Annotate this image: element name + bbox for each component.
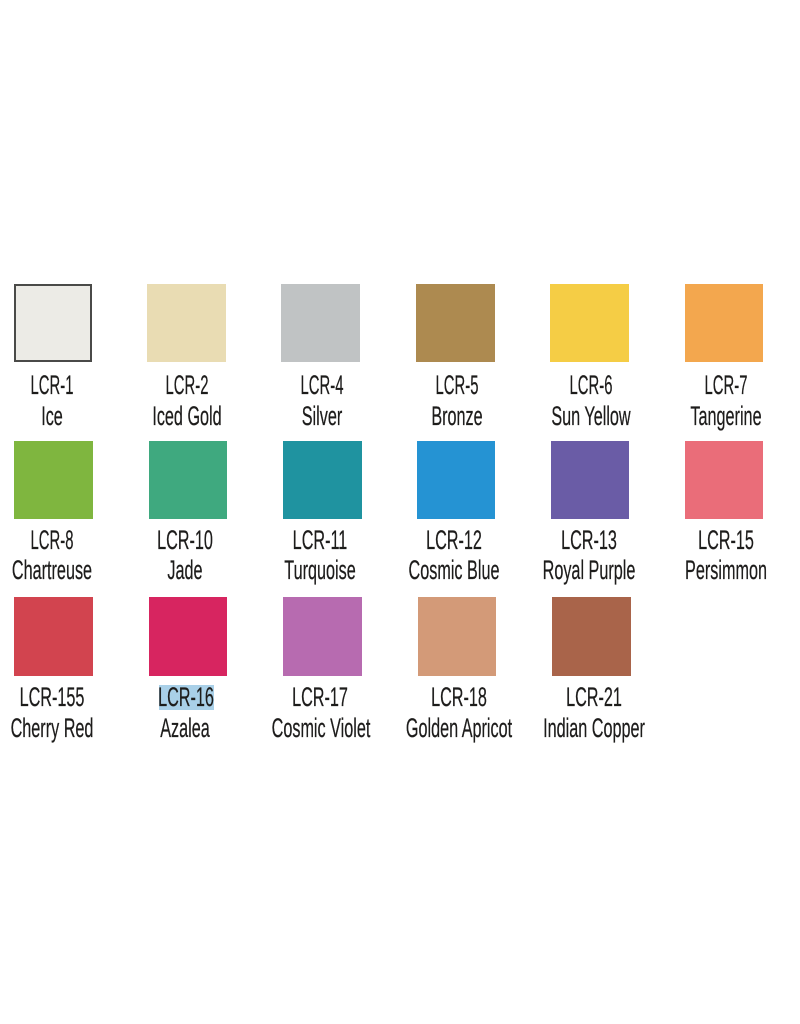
code label: LCR-6 <box>570 370 612 400</box>
name label: Silver <box>302 401 342 431</box>
swatch: LCR-5 Bronze <box>416 284 495 431</box>
name label: Ice <box>41 401 63 431</box>
code label: LCR-2 <box>166 370 208 400</box>
name label: Tangerine <box>690 401 762 431</box>
swatch: LCR-6 Sun Yellow <box>550 284 631 431</box>
code label: LCR-17 <box>292 682 348 712</box>
color square <box>551 441 629 519</box>
color square <box>149 597 227 676</box>
code label: LCR-1 <box>31 370 73 400</box>
name label: Bronze <box>431 401 483 431</box>
name label: Turquoise <box>284 555 356 585</box>
swatch: LCR-13 Royal Purple <box>543 441 635 585</box>
code label: LCR-10 <box>157 525 213 555</box>
code label: LCR-21 <box>566 682 622 712</box>
name label: Cherry Red <box>11 713 93 743</box>
color square <box>418 597 496 676</box>
color square <box>416 284 495 362</box>
swatch: LCR-7 Tangerine <box>685 284 763 431</box>
name label: Sun Yellow <box>551 401 631 431</box>
swatch: LCR-12 Cosmic Blue <box>409 441 499 585</box>
name label: Iced Gold <box>152 401 222 431</box>
code label: LCR-18 <box>431 682 487 712</box>
swatch: LCR-1 Ice <box>14 284 92 431</box>
color square <box>552 597 631 676</box>
color square <box>281 284 360 362</box>
name label: Azalea <box>160 713 210 743</box>
swatch: LCR-18 Golden Apricot <box>406 597 512 743</box>
swatch: LCR-16 Azalea <box>149 597 227 743</box>
code label: LCR-8 <box>31 525 73 555</box>
color square <box>14 441 93 519</box>
code label: LCR-12 <box>426 525 482 555</box>
code label: LCR-7 <box>705 370 747 400</box>
color square <box>283 597 362 676</box>
code label: LCR-155 <box>20 682 84 712</box>
text highlight <box>159 685 214 710</box>
color square <box>283 441 362 519</box>
color square <box>147 284 226 362</box>
swatch: LCR-10 Jade <box>149 441 227 585</box>
swatch: LCR-11 Turquoise <box>283 441 362 585</box>
code label: LCR-11 <box>293 525 347 555</box>
swatch: LCR-155 Cherry Red <box>11 597 93 743</box>
name label: Persimmon <box>685 555 767 585</box>
code label: LCR-5 <box>436 370 478 400</box>
code label: LCR-16 <box>158 682 214 712</box>
swatch: LCR-15 Persimmon <box>685 441 767 585</box>
swatch: LCR-4 Silver <box>281 284 360 431</box>
color square <box>149 441 227 519</box>
name label: Jade <box>167 555 203 585</box>
code label: LCR-4 <box>301 370 343 400</box>
code label: LCR-15 <box>698 525 754 555</box>
color square <box>550 284 629 362</box>
color square <box>14 597 93 676</box>
name label: Golden Apricot <box>406 713 512 743</box>
name label: Cosmic Blue <box>409 555 499 585</box>
color square <box>685 284 763 362</box>
name label: Chartreuse <box>12 555 92 585</box>
name label: Royal Purple <box>543 555 635 585</box>
color square <box>14 284 92 362</box>
swatch: LCR-17 Cosmic Violet <box>272 597 370 743</box>
swatch: LCR-21 Indian Copper <box>543 597 645 743</box>
name label: Indian Copper <box>543 713 645 743</box>
name label: Cosmic Violet <box>272 713 370 743</box>
swatch: LCR-8 Chartreuse <box>12 441 93 585</box>
color square <box>417 441 495 519</box>
code label: LCR-13 <box>561 525 617 555</box>
color square <box>685 441 763 519</box>
swatch: LCR-2 Iced Gold <box>147 284 226 431</box>
